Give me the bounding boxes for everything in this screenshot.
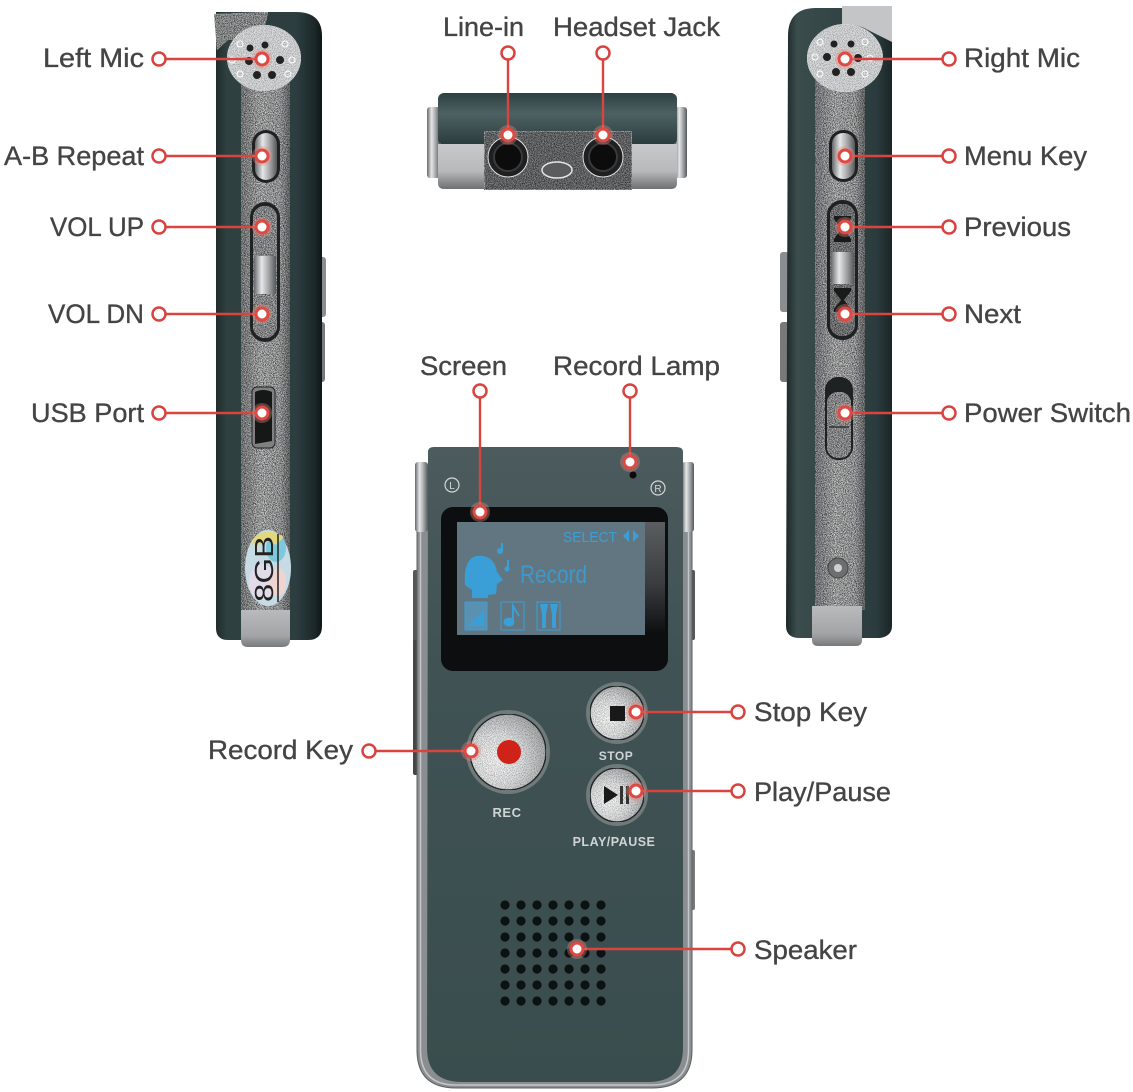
callout: Stop Key: Stop Key	[754, 697, 868, 727]
callout: Menu Key: Menu Key	[964, 141, 1087, 171]
R mark: R	[654, 484, 662, 495]
volume rocker	[250, 202, 280, 342]
callout: Left Mic	[43, 43, 272, 73]
REC caption: REC	[493, 805, 522, 820]
L mark: L	[449, 481, 455, 492]
callout: Headset Jack	[553, 12, 720, 145]
menu key	[829, 130, 858, 182]
LCD mode icons	[465, 602, 560, 630]
play pause button	[586, 764, 648, 826]
callout: USB Port: USB Port	[31, 398, 144, 428]
callout: VOL DN: VOL DN	[48, 299, 144, 329]
callout: Line-in: Line-in	[443, 12, 524, 42]
left mic grille	[227, 25, 301, 91]
line-in jack	[488, 137, 528, 177]
callout: A-B Repeat	[4, 141, 272, 171]
callout: A-B Repeat: A-B Repeat	[4, 141, 144, 171]
callout: Screen	[420, 351, 507, 522]
LCD status text: SELECT	[563, 529, 617, 546]
callout: Play/Pause: Play/Pause	[754, 777, 891, 807]
callout: Record Lamp	[553, 351, 720, 472]
callout: Power Switch	[835, 398, 1131, 428]
L mark	[445, 478, 459, 492]
callout: Screen: Screen	[420, 351, 507, 381]
R mark	[651, 481, 665, 495]
callout: Next: Next	[964, 299, 1021, 329]
callout: Speaker	[567, 935, 857, 965]
callout: USB Port	[31, 398, 272, 428]
USB port	[252, 387, 275, 448]
jack plate	[484, 131, 632, 190]
device: top end view	[427, 93, 687, 190]
8GB hologram sticker	[245, 530, 291, 606]
8GB hologram sticker: 8GB	[249, 536, 279, 602]
callout: Play/Pause	[626, 777, 891, 807]
callout: Record Key: Record Key	[208, 735, 353, 765]
A-B repeat button	[252, 130, 280, 183]
callout: Left Mic: Left Mic	[43, 43, 144, 73]
record lamp	[630, 472, 636, 478]
LCD record icon	[465, 543, 510, 598]
callout: VOL UP	[50, 212, 272, 242]
callout: Right Mic: Right Mic	[964, 43, 1080, 73]
device: right side view	[780, 6, 892, 646]
callout: Headset Jack: Headset Jack	[553, 12, 720, 42]
callout: Record Lamp: Record Lamp	[553, 351, 720, 381]
callout: Stop Key	[626, 697, 868, 727]
device: left side view	[214, 12, 326, 647]
right mic grille	[807, 24, 883, 92]
headset jack	[583, 137, 623, 177]
previous / next rocker	[827, 200, 858, 340]
LCD mode text: Record	[520, 561, 587, 589]
LCD arrows	[623, 530, 639, 542]
record button	[466, 710, 550, 794]
callout: VOL DN	[48, 299, 272, 329]
power switch	[825, 377, 853, 460]
PLAY/PAUSE caption: PLAY/PAUSE	[573, 835, 655, 849]
screw	[828, 558, 848, 578]
callout: VOL UP: VOL UP	[50, 212, 144, 242]
STOP caption: STOP	[599, 749, 633, 763]
callout: Next	[835, 299, 1021, 329]
callout: Menu Key	[835, 141, 1087, 171]
callout: Previous: Previous	[964, 212, 1071, 242]
screen	[441, 507, 668, 671]
callout: Line-in	[443, 12, 524, 145]
callout: Record Key	[208, 735, 481, 765]
callout: Power Switch: Power Switch	[964, 398, 1131, 428]
stop button	[586, 682, 648, 744]
callout: Right Mic	[835, 43, 1080, 73]
device: front view	[413, 447, 695, 1088]
speaker grille	[500, 900, 606, 1006]
callout: Speaker: Speaker	[754, 935, 857, 965]
callout: Previous	[835, 212, 1071, 242]
